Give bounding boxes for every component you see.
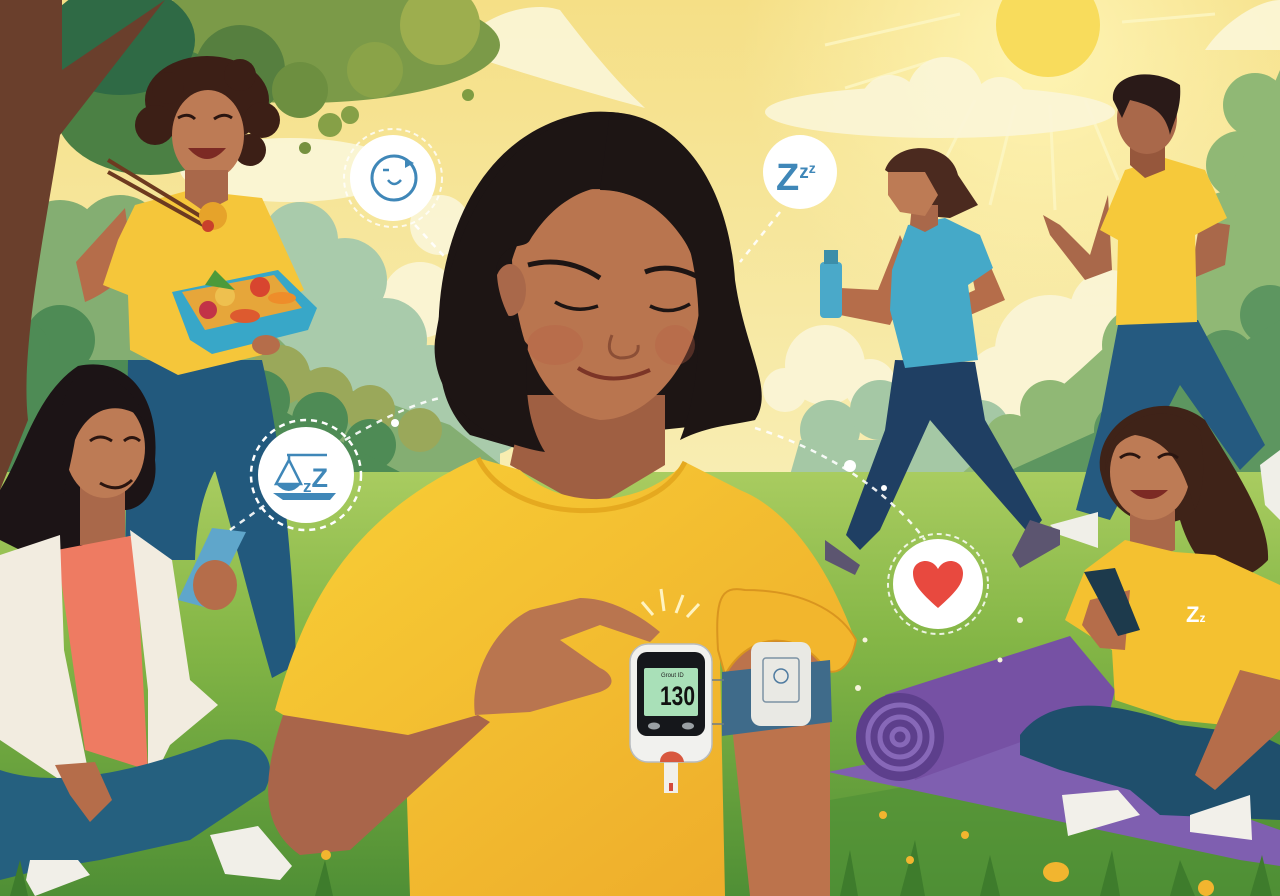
- mid tree: [0, 195, 510, 472]
- sun glow: [740, 0, 1280, 350]
- icon: sleep: Z: [776, 157, 799, 199]
- closed eyes: [555, 302, 690, 311]
- sleeve roll: [717, 589, 856, 675]
- icon: balance and sleep: z: [303, 477, 312, 496]
- yellow shirt: [103, 190, 304, 375]
- hand pinching: [474, 598, 660, 715]
- yoga mat on ground: [828, 636, 1280, 866]
- sensor device: [751, 642, 811, 726]
- sneakers: [1062, 790, 1252, 840]
- dark tree: [0, 305, 400, 472]
- icon: smiley face: [344, 129, 442, 227]
- long black hair: [0, 364, 156, 575]
- tree trunk: [0, 0, 165, 490]
- hand on knee: [55, 762, 112, 822]
- eyes: [178, 115, 232, 119]
- icon: sleep: [763, 135, 837, 209]
- icon: balance and sleep: Z: [312, 463, 328, 493]
- icon: sleep: z: [799, 162, 809, 183]
- eyebrows: [528, 262, 700, 278]
- arm and hand: [1082, 590, 1280, 790]
- right upper arm: [725, 638, 830, 896]
- strip port: [660, 752, 684, 762]
- curly hair: [135, 56, 280, 166]
- fringe: [1105, 414, 1203, 510]
- hand under box: [252, 335, 280, 355]
- central woman: [268, 112, 856, 896]
- white cardigan: [0, 530, 218, 790]
- eyes: [1120, 454, 1178, 458]
- connector: dashed lines between icons and woman: [230, 212, 925, 540]
- front hair left: [435, 112, 640, 452]
- distant trees left: [0, 195, 525, 472]
- hair fringe: [56, 376, 145, 505]
- smile: [188, 148, 226, 159]
- sun: [996, 0, 1100, 77]
- pale tree: [170, 202, 525, 470]
- blue shirt: [890, 218, 993, 368]
- mouth: [578, 368, 650, 379]
- lunch box: [172, 270, 317, 354]
- nose: [609, 335, 638, 358]
- person: seated woman with phone: [0, 364, 292, 896]
- phone: [1084, 568, 1140, 636]
- arms: [840, 235, 1005, 328]
- water bottle: [820, 250, 842, 318]
- lcd label: Grout ID: [661, 673, 684, 679]
- meter body: [630, 644, 712, 762]
- back hair: [439, 112, 762, 455]
- hair: [885, 148, 978, 218]
- flat mat: [828, 735, 1280, 866]
- alert ticks: [642, 589, 699, 617]
- test strip: [664, 755, 678, 793]
- buttons: [648, 722, 694, 730]
- lcd: [644, 668, 698, 716]
- pale tree: [790, 380, 1020, 475]
- icon: balance and sleep: [251, 420, 361, 530]
- icon: sleep: z: [809, 160, 816, 176]
- grass field: [0, 472, 1280, 896]
- left arm: [268, 715, 490, 855]
- neck: [910, 205, 938, 232]
- mid tree: [960, 70, 1280, 475]
- person: seated woman with phone on mat: [1020, 406, 1280, 840]
- foreground flowers and grass: [10, 617, 1272, 896]
- armband: [722, 660, 832, 736]
- jeans crossed legs: [0, 739, 270, 880]
- smile and eyes: [90, 437, 140, 488]
- roll end: [856, 693, 944, 781]
- clouds: [180, 0, 1280, 425]
- neck: [80, 480, 125, 545]
- face: [888, 172, 938, 216]
- hair: [1113, 74, 1180, 135]
- neck: [510, 395, 665, 510]
- face: [1110, 424, 1190, 520]
- yellow shirt: [1100, 158, 1227, 325]
- head: [1117, 82, 1177, 154]
- lcd reading: 130: [660, 681, 695, 711]
- t-shirt body: [275, 458, 855, 896]
- smile: [1130, 490, 1168, 499]
- arms: [1043, 195, 1230, 300]
- hair: [1100, 406, 1268, 578]
- chopsticks and food: [108, 160, 227, 232]
- coral top: [57, 535, 148, 770]
- shoes: [1050, 450, 1280, 548]
- trousers: [125, 360, 296, 678]
- raised arm: [76, 200, 200, 302]
- distant trees right: [790, 70, 1280, 475]
- person: jogging woman with water bottle: [820, 148, 1060, 575]
- dark tree: [1000, 285, 1280, 475]
- shoes: [825, 520, 1060, 575]
- neck: [1130, 510, 1175, 560]
- icon: heart: [888, 534, 988, 634]
- meter screen bezel: [637, 652, 705, 736]
- sparkles: [391, 419, 887, 491]
- ear: [494, 264, 526, 316]
- face: [65, 398, 145, 498]
- collar: [478, 458, 685, 511]
- yellow shirt: [1065, 540, 1280, 725]
- shirt logo: Zz: [1186, 602, 1205, 627]
- neck: [185, 170, 228, 212]
- hand on phone: [193, 560, 237, 610]
- face: [172, 90, 244, 180]
- rolled mat body: [885, 636, 1115, 780]
- phone: [178, 528, 246, 608]
- cheeks: [527, 325, 695, 365]
- sneakers: [26, 826, 292, 896]
- tree foliage: [45, 0, 500, 175]
- neck: [1130, 140, 1165, 178]
- olive tree: [250, 345, 442, 452]
- person: jogging man: [1043, 74, 1280, 548]
- roll spiral: [868, 705, 932, 769]
- legs: [1020, 706, 1280, 820]
- glucose meter: [630, 644, 712, 793]
- leggings: [846, 360, 1042, 550]
- trousers: [1076, 320, 1265, 520]
- face: [512, 189, 700, 420]
- sun rays: [825, 14, 1215, 210]
- connector wires: [712, 680, 724, 724]
- front hair right: [600, 112, 760, 440]
- person: woman eating from lunch box: [76, 56, 317, 678]
